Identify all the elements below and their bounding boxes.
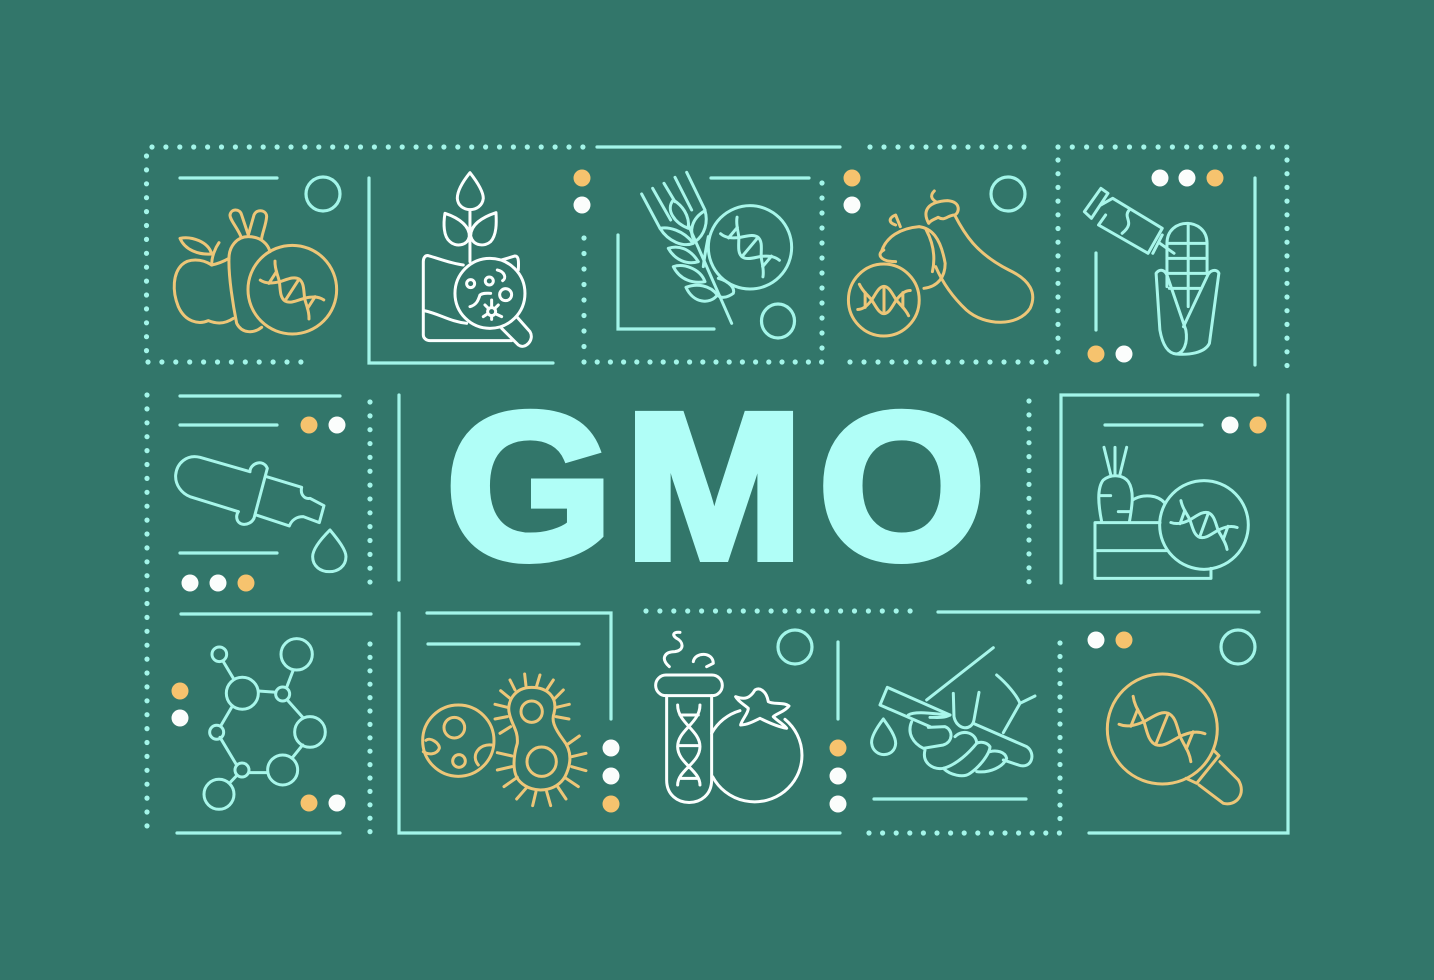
icon: wheat and DNA <box>642 172 792 323</box>
title: GMO <box>446 370 985 602</box>
panel: DNA magnifier <box>938 395 1288 833</box>
panel: molecule <box>172 614 371 834</box>
icon: pipette and drop <box>176 457 346 572</box>
icon: hand holding tube <box>872 648 1035 776</box>
icon: pepper, eggplant and DNA <box>848 191 1033 336</box>
icon: vial injecting corn <box>1084 188 1219 354</box>
icon: plant and magnifier <box>423 173 531 346</box>
icon: molecule <box>204 639 325 809</box>
panel: apple and carrot <box>146 147 590 362</box>
panel: hand with tube <box>869 643 1062 833</box>
panel: pepper and eggplant <box>844 147 1060 362</box>
panel: vegetable crate <box>1029 395 1266 584</box>
icon: magnifier over DNA <box>1107 674 1241 804</box>
panel: bacteria <box>399 613 840 833</box>
panel: wheat <box>584 147 840 362</box>
icon: test tube and tomato <box>656 632 802 802</box>
icon: crate with carrot and DNA <box>1095 447 1248 578</box>
panel: test tube and tomato <box>646 611 912 812</box>
icon: apple, carrot and DNA <box>174 210 337 334</box>
panel: plant under magnifier <box>369 170 590 363</box>
panel: pipette <box>147 395 399 828</box>
icon: cell and bacterium <box>423 674 586 806</box>
panel: corn and vial <box>1058 147 1288 366</box>
